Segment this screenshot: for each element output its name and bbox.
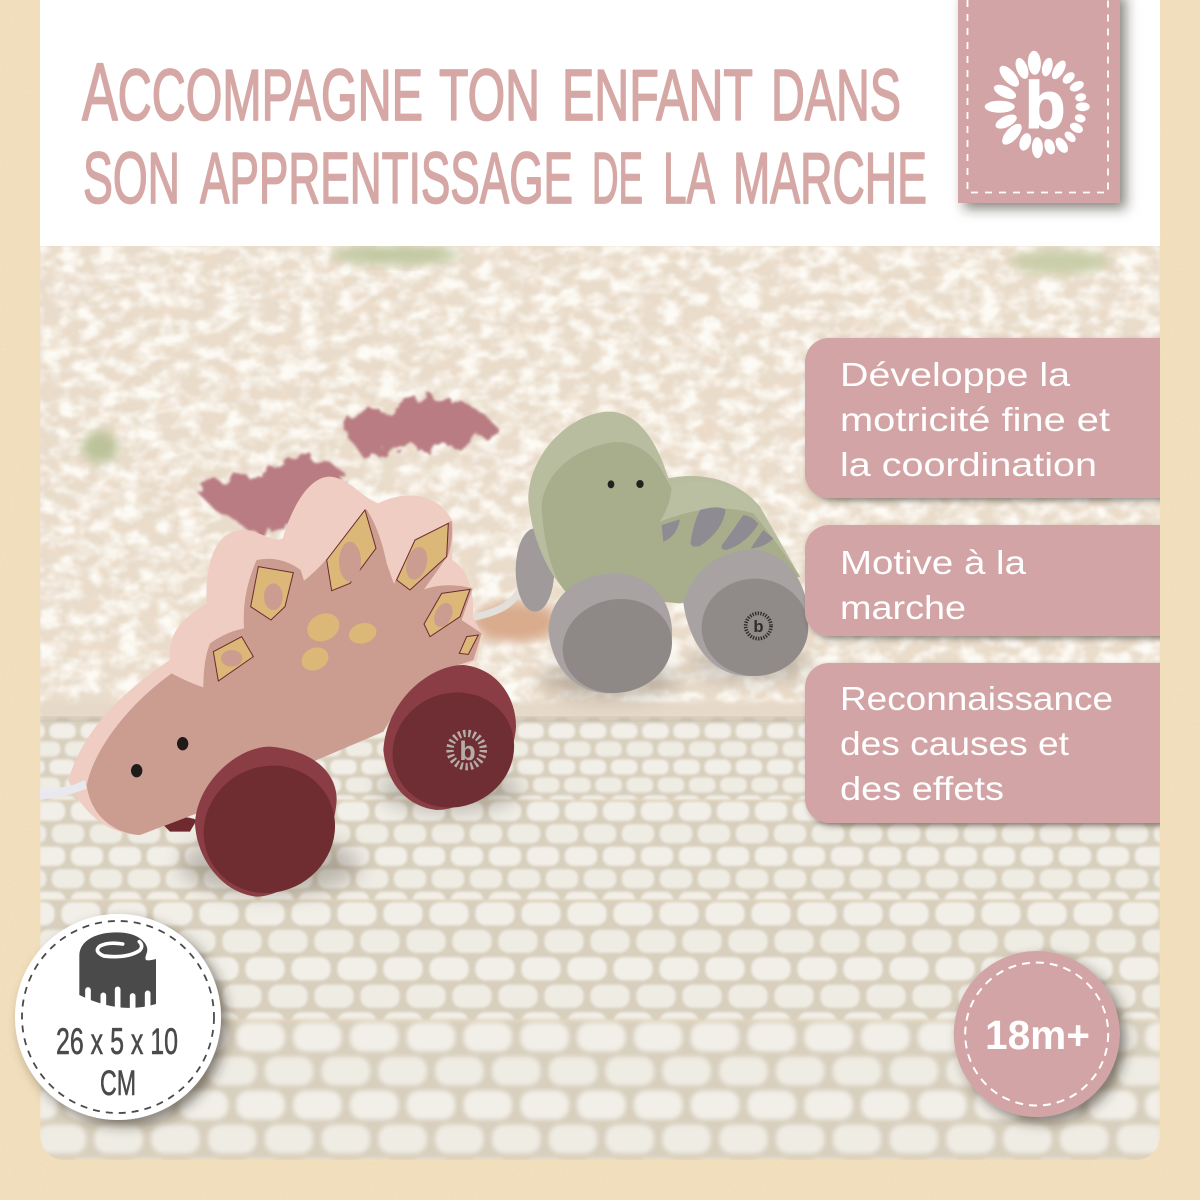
benefit card: fine motor skills	[805, 338, 1165, 498]
benefit card: cause and effect: des causes et	[840, 725, 1069, 762]
benefit card: cause and effect	[805, 663, 1165, 823]
header: white title band	[40, 0, 1160, 246]
title: SON	[83, 139, 180, 219]
pull string	[472, 588, 520, 620]
benefit card: fine motor skills: motricité fine et	[840, 401, 1110, 438]
title: APPRENTISSAGE	[200, 139, 573, 219]
toy shadows	[180, 650, 810, 895]
dimensions badge: CM	[100, 1064, 136, 1103]
title: MARCHE	[733, 139, 927, 219]
title: DE	[592, 139, 643, 219]
benefit card: cause and effect: des effets	[840, 770, 1004, 807]
title: TON	[439, 56, 540, 136]
dimensions badge: 26 x 5 x 10	[56, 1021, 178, 1062]
photo: rugs and toys	[40, 245, 1160, 1160]
green dinosaur toy: b	[753, 617, 764, 636]
upper shaggy rug	[40, 245, 1160, 726]
icon: measuring tape	[79, 932, 156, 1017]
logo tag: b	[1025, 68, 1065, 142]
benefit card: walking	[805, 525, 1165, 636]
benefit card: walking: Motive à la	[840, 544, 1027, 581]
pull string left	[40, 786, 68, 794]
benefit card: fine motor skills: la coordination	[840, 446, 1097, 483]
green dinosaur toy	[516, 412, 808, 703]
pink stegosaurus toy	[40, 477, 533, 917]
pink stegosaurus toy: b	[459, 736, 476, 766]
lower woven mat	[40, 718, 1160, 1160]
title	[82, 47, 927, 219]
title: ACCOMPAGNE	[82, 47, 423, 138]
title: LA	[663, 139, 715, 219]
age badge	[954, 951, 1120, 1117]
title: ENFANT	[562, 56, 753, 136]
rug edge shadow	[40, 717, 1160, 721]
benefit card: cause and effect: Reconnaissance	[840, 680, 1113, 717]
benefit card: walking: marche	[840, 589, 966, 626]
benefit card: fine motor skills: Développe la	[840, 356, 1071, 393]
logo tag	[958, 0, 1120, 203]
title: DANS	[771, 56, 901, 136]
age badge: 18m+	[985, 1012, 1090, 1058]
dimensions badge	[15, 914, 221, 1120]
